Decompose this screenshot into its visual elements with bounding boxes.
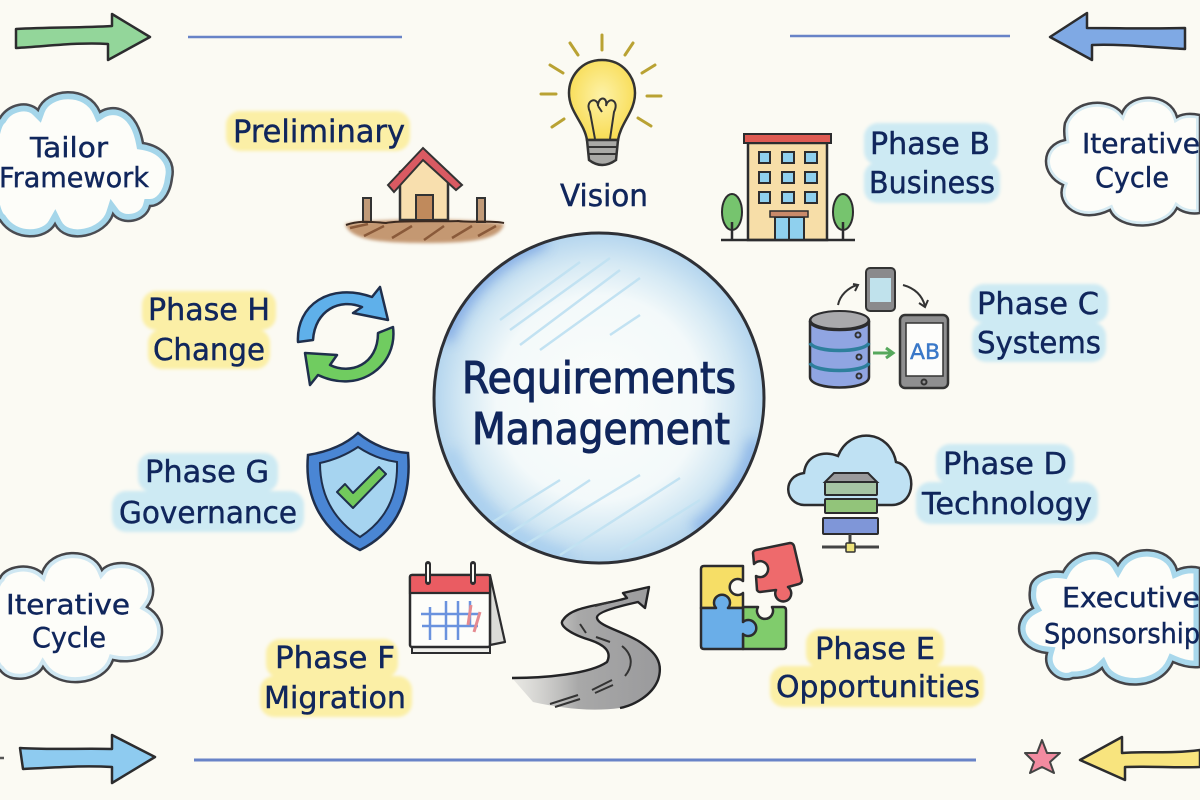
label: phase b business: Business — [869, 166, 995, 201]
label: phase c systems — [970, 284, 1108, 362]
icon: house — [345, 148, 504, 243]
label: preliminary: Preliminary — [233, 114, 405, 150]
label: phase e opportunities — [770, 629, 984, 707]
label: phase d technology: Phase D — [943, 447, 1067, 482]
label: phase e opportunities: Opportunities — [776, 670, 980, 705]
label: iterative cycle bottom left: Cycle — [32, 621, 106, 654]
label: iterative cycle bottom left: Iterative — [6, 588, 130, 621]
arrow: bottom left blue — [20, 735, 155, 783]
label: iterative cycle top right: Cycle — [1095, 161, 1169, 194]
cloud: iterative cycle top right — [1046, 98, 1200, 226]
central orb: requirements management — [434, 233, 764, 563]
label: iterative cycle top right: Iterative — [1082, 127, 1200, 160]
icon: star — [1025, 740, 1060, 773]
icon: database and devices — [810, 268, 948, 388]
icon: light bulb — [541, 35, 661, 165]
line: bottom — [194, 758, 976, 762]
arrow: top left green — [16, 14, 150, 60]
heading: requirements management: Management — [472, 404, 730, 455]
label: phase g governance: Governance — [119, 496, 297, 531]
label: phase h change: Phase H — [148, 293, 270, 328]
label: tailor framework: Tailor — [29, 131, 109, 164]
icon: cloud server — [788, 436, 911, 552]
label: phase g governance: Phase G — [145, 455, 269, 490]
line: top right — [790, 35, 1010, 37]
icon: cycle arrows — [298, 287, 393, 385]
label: executive sponsorship: Executive — [1062, 581, 1200, 614]
icon: winding road — [512, 587, 660, 710]
label: phase f migration — [260, 639, 412, 717]
small mark: bottom left dash — [0, 757, 4, 759]
label: phase b business — [864, 123, 1000, 203]
icon: shield — [307, 433, 409, 550]
label: vision: Vision — [560, 179, 648, 214]
label: phase c systems: Systems — [977, 326, 1101, 361]
label: phase b business: Phase B — [870, 127, 990, 162]
label: phase h change: Change — [153, 333, 265, 368]
label: phase f migration: Phase F — [275, 641, 395, 676]
arrow: top right blue — [1050, 13, 1185, 60]
label: tailor framework: Framework — [0, 161, 150, 194]
icon: puzzle — [701, 543, 802, 649]
line: top left — [188, 36, 402, 38]
label: phase c systems: Phase C — [977, 287, 1099, 322]
cloud: tailor framework — [0, 92, 173, 236]
arrow: bottom right yellow — [1080, 737, 1200, 780]
icon: office building — [721, 134, 855, 240]
label: phase f migration: Migration — [264, 681, 406, 716]
label: phase d technology — [916, 444, 1098, 524]
label: phase h change — [142, 291, 276, 369]
icon: calendar — [410, 564, 505, 653]
icon: database and devices: AB — [910, 340, 940, 364]
cloud: iterative cycle bottom left — [0, 553, 162, 682]
label: phase g governance — [112, 453, 304, 532]
cloud: executive sponsorship — [1019, 550, 1200, 685]
heading: requirements management: Requirements — [462, 353, 736, 404]
label: phase e opportunities: Phase E — [815, 632, 935, 667]
label: phase d technology: Technology — [921, 487, 1092, 522]
